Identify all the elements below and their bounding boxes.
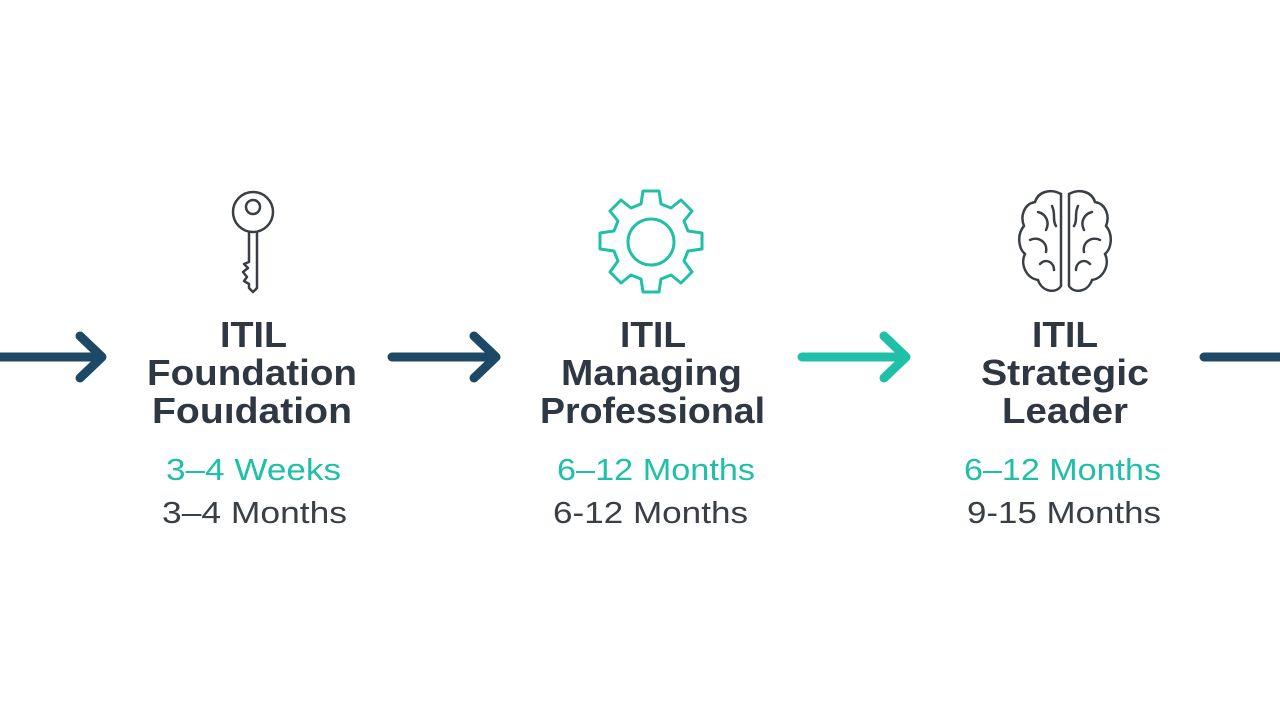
stage 1 text: ITIL [220,314,287,355]
stage 3 durations [964,452,1161,530]
stage 3 durations: 9-15 Months [967,495,1161,530]
arrow: right exit [1204,352,1280,362]
arrow: managing to strategic (teal) [802,336,906,378]
stage 2 durations [553,452,755,530]
arrow: left entry [0,336,102,378]
stage 1 text [147,314,357,431]
stage 1 durations: 3–4 Weeks [166,452,341,487]
stage 3 text: ITIL [1032,314,1098,355]
icon: gear [600,191,702,292]
stage 2 text: ITIL [620,314,686,355]
stage 2 text: Professional [540,390,765,431]
stage 2 durations: 6–12 Months [557,452,755,487]
stage 3 durations: 6–12 Months [964,452,1161,487]
stage 2 text [540,314,765,431]
icon: brain [1019,191,1111,291]
stage 3 text: Leader [1002,390,1128,431]
stage 1 text: Foundation [147,352,357,393]
arrow: foundation to managing [392,336,496,378]
stage 2 text: Managing [561,352,742,393]
stage 3 text: Strategic [981,352,1149,393]
stage 3 text [981,314,1149,431]
stage 1 text: Fouıdation [152,390,352,431]
stage 2 durations: 6-12 Months [553,495,748,530]
stage 1 durations [162,452,347,530]
icon: key [233,192,273,292]
stage 1 durations: 3–4 Months [162,495,347,530]
